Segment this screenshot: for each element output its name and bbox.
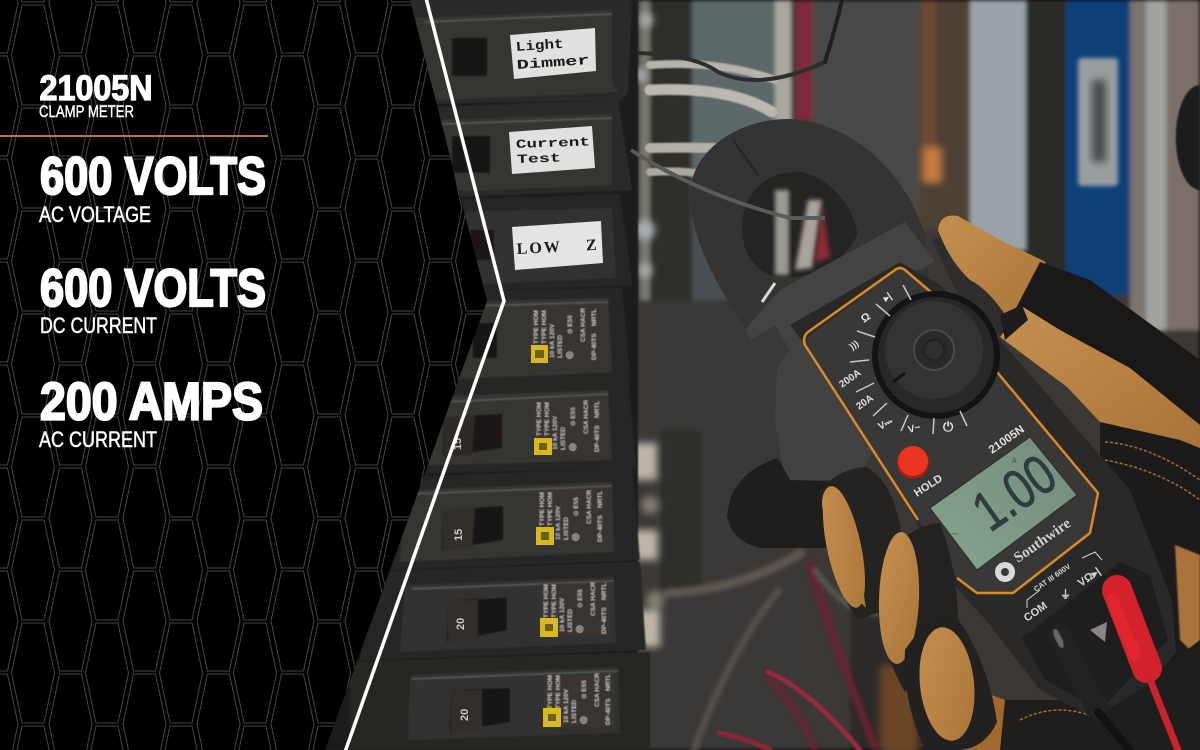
spec: DC current: 600 VOLTS xyxy=(40,259,266,318)
breaker info prints with yellow logos: ⊙ E55 xyxy=(573,497,580,516)
breaker info prints with yellow logos: TYPE HOM xyxy=(547,492,554,526)
breaker info prints with yellow logos: ⊙ E55 xyxy=(570,407,577,426)
Southwire logo: Southwire xyxy=(1011,515,1074,566)
dial labels: ))) xyxy=(847,338,861,352)
red test probe xyxy=(1112,590,1178,750)
breaker info prints with yellow logos: ⊙ E55 xyxy=(577,589,584,608)
orange trim on meter face xyxy=(804,268,1098,593)
dial labels: 21005N xyxy=(987,424,1027,456)
breaker info prints with yellow logos: 10 kA 120V xyxy=(552,415,559,450)
hold button xyxy=(897,446,929,479)
breaker info prints with yellow logos: LISTED xyxy=(571,700,578,723)
LCD screen reading 1.00 xyxy=(930,437,1077,570)
breaker handle ratings: 20 xyxy=(455,618,467,630)
breaker info prints with yellow logos: DP-40TS xyxy=(597,515,604,542)
dial tick marks xyxy=(850,285,967,434)
handwritten-style tape labels: LOW Z xyxy=(516,237,597,258)
spec: AC voltage: AC VOLTAGE xyxy=(39,202,151,227)
breaker info prints with yellow logos: 10 kA 120V xyxy=(555,505,562,540)
breaker info prints with yellow logos: NRTL xyxy=(605,674,612,691)
breaker info prints with yellow logos: ⊙ E55 xyxy=(581,680,588,699)
dial labels: Ω xyxy=(859,310,873,325)
breaker info prints with yellow logos: DP-40TS xyxy=(591,333,598,360)
terminal labels: ⏚ xyxy=(1060,588,1071,601)
breaker info prints with yellow logos: CSA HACR xyxy=(583,400,590,434)
breaker info prints with yellow logos: LISTED xyxy=(557,335,564,358)
terminal labels xyxy=(1022,552,1103,624)
breaker bodies xyxy=(320,0,650,750)
LCD screen reading 1.00: 1.00 xyxy=(961,442,1067,543)
breaker handle ratings xyxy=(452,438,471,721)
terminal recess xyxy=(1022,562,1168,710)
breaker info prints with yellow logos: NRTL xyxy=(594,401,601,418)
breaker info prints with yellow logos: ◎ xyxy=(564,351,574,359)
handwritten-style tape labels: Dimmer xyxy=(516,54,590,74)
breaker info prints with yellow logos: ◎ xyxy=(567,443,577,451)
product model heading: 21005N xyxy=(40,69,152,108)
blue panel label xyxy=(1078,58,1200,190)
breaker info prints with yellow logos xyxy=(530,308,614,727)
spec: AC voltage: 600 VOLTS xyxy=(40,147,266,206)
breaker info prints with yellow logos: CSA HACR xyxy=(586,490,593,524)
breaker info prints with yellow logos: LISTED xyxy=(560,427,567,450)
breaker info prints with yellow logos: TYPE HOM xyxy=(555,675,562,709)
breaker info prints with yellow logos: ◎ xyxy=(574,625,584,633)
breaker info prints with yellow logos: TYPE HOM xyxy=(539,492,546,526)
breaker info prints with yellow logos: CSA HACR xyxy=(590,582,597,616)
dial labels: ⏻ xyxy=(943,419,954,434)
breaker info prints with yellow logos: LISTED xyxy=(563,517,570,540)
background: blurred enclosure xyxy=(300,0,1200,750)
terminal labels: VΩ▸| xyxy=(1076,565,1103,589)
breaker handle ratings: 15 xyxy=(453,529,465,541)
spec: DC current xyxy=(40,259,266,338)
breaker info prints with yellow logos: DP-40TS xyxy=(601,607,608,634)
breaker info prints with yellow logos: NRTL xyxy=(591,309,598,326)
spec: DC current: DC CURRENT xyxy=(40,313,157,338)
glove: back of hand at right xyxy=(932,216,1200,750)
black test probe xyxy=(1055,632,1130,750)
dial labels: V~ xyxy=(907,422,922,436)
breaker info prints with yellow logos: CSA HACR xyxy=(594,673,601,707)
dark and coloured wires xyxy=(620,0,885,750)
left panel: black chevron with hexagon pattern xyxy=(0,0,487,750)
white chevron outline xyxy=(345,0,504,750)
breaker info prints with yellow logos: 10 kA 120V xyxy=(549,323,556,358)
dial labels: HOLD xyxy=(912,472,945,500)
orange reflection and brown blur xyxy=(880,147,942,750)
breaker info prints with yellow logos: TYPE HOM xyxy=(543,584,550,618)
terminal labels: COM xyxy=(1022,600,1050,624)
LCD screen reading 1.00: A xyxy=(1012,458,1017,465)
breaker info prints with yellow logos: 10 kA 120V xyxy=(559,597,566,632)
blurred breaker terminal hardware xyxy=(631,13,664,647)
breaker handle ratings: 20 xyxy=(459,709,471,721)
terminal labels: CAT III 600V xyxy=(1032,562,1072,594)
breaker info prints with yellow logos: 10 kA 120V xyxy=(563,688,570,723)
breaker info prints with yellow logos: ⊙ E55 xyxy=(567,315,574,334)
divider line xyxy=(0,135,268,137)
dial labels: 200A xyxy=(837,368,863,390)
light grey cables xyxy=(650,64,775,174)
breaker info prints with yellow logos: DP-40TS xyxy=(594,425,601,452)
dial labels: ▸| xyxy=(881,291,894,305)
meter body xyxy=(790,262,1178,750)
dial labels xyxy=(837,291,1027,500)
breaker info prints with yellow logos: NRTL xyxy=(601,583,608,600)
spec: AC current: 200 AMPS xyxy=(40,372,263,432)
breaker info prints with yellow logos: ◎ xyxy=(578,716,588,724)
spec list xyxy=(0,69,268,452)
breaker info prints with yellow logos: TYPE HOM xyxy=(551,584,558,618)
dial labels: V⎓ xyxy=(877,417,895,433)
dial labels: 20A xyxy=(854,393,876,412)
clamp meter jaws xyxy=(631,119,935,548)
panel: stacked circuit breakers xyxy=(320,0,1200,750)
breaker handle ratings: 15 xyxy=(452,438,464,450)
breaker info prints with yellow logos: NRTL xyxy=(597,491,604,508)
breaker info prints with yellow logos: TYPE HOM xyxy=(536,402,543,436)
handwritten-style tape labels xyxy=(509,28,603,270)
glove: fingers gripping the meter xyxy=(814,467,997,750)
breaker info prints with yellow logos: TYPE HOM xyxy=(547,675,554,709)
breaker info prints with yellow logos: LISTED xyxy=(567,609,574,632)
breaker info prints with yellow logos: TYPE HOM xyxy=(541,310,548,344)
spec: AC voltage xyxy=(39,147,266,227)
Southwire logo xyxy=(995,515,1074,582)
handwritten-style tape labels: Test xyxy=(517,151,561,167)
LCD screen reading 1.00: ~ xyxy=(951,526,959,541)
rotary selector knob xyxy=(872,291,1000,419)
handwritten-style tape labels: Light xyxy=(515,38,564,56)
spec: AC current: AC CURRENT xyxy=(39,427,157,452)
hand grip under meter xyxy=(727,458,850,548)
breaker info prints with yellow logos: TYPE HOM xyxy=(533,310,540,344)
product model heading: CLAMP METER xyxy=(39,102,134,121)
breaker info prints with yellow logos: CSA HACR xyxy=(580,308,587,342)
breaker info prints with yellow logos: DP-40TS xyxy=(605,698,612,725)
breaker info prints with yellow logos: TYPE HOM xyxy=(544,402,551,436)
handwritten-style tape labels: Current xyxy=(516,135,590,152)
breaker info prints with yellow logos: ◎ xyxy=(570,533,580,541)
spec: AC current xyxy=(39,372,263,452)
